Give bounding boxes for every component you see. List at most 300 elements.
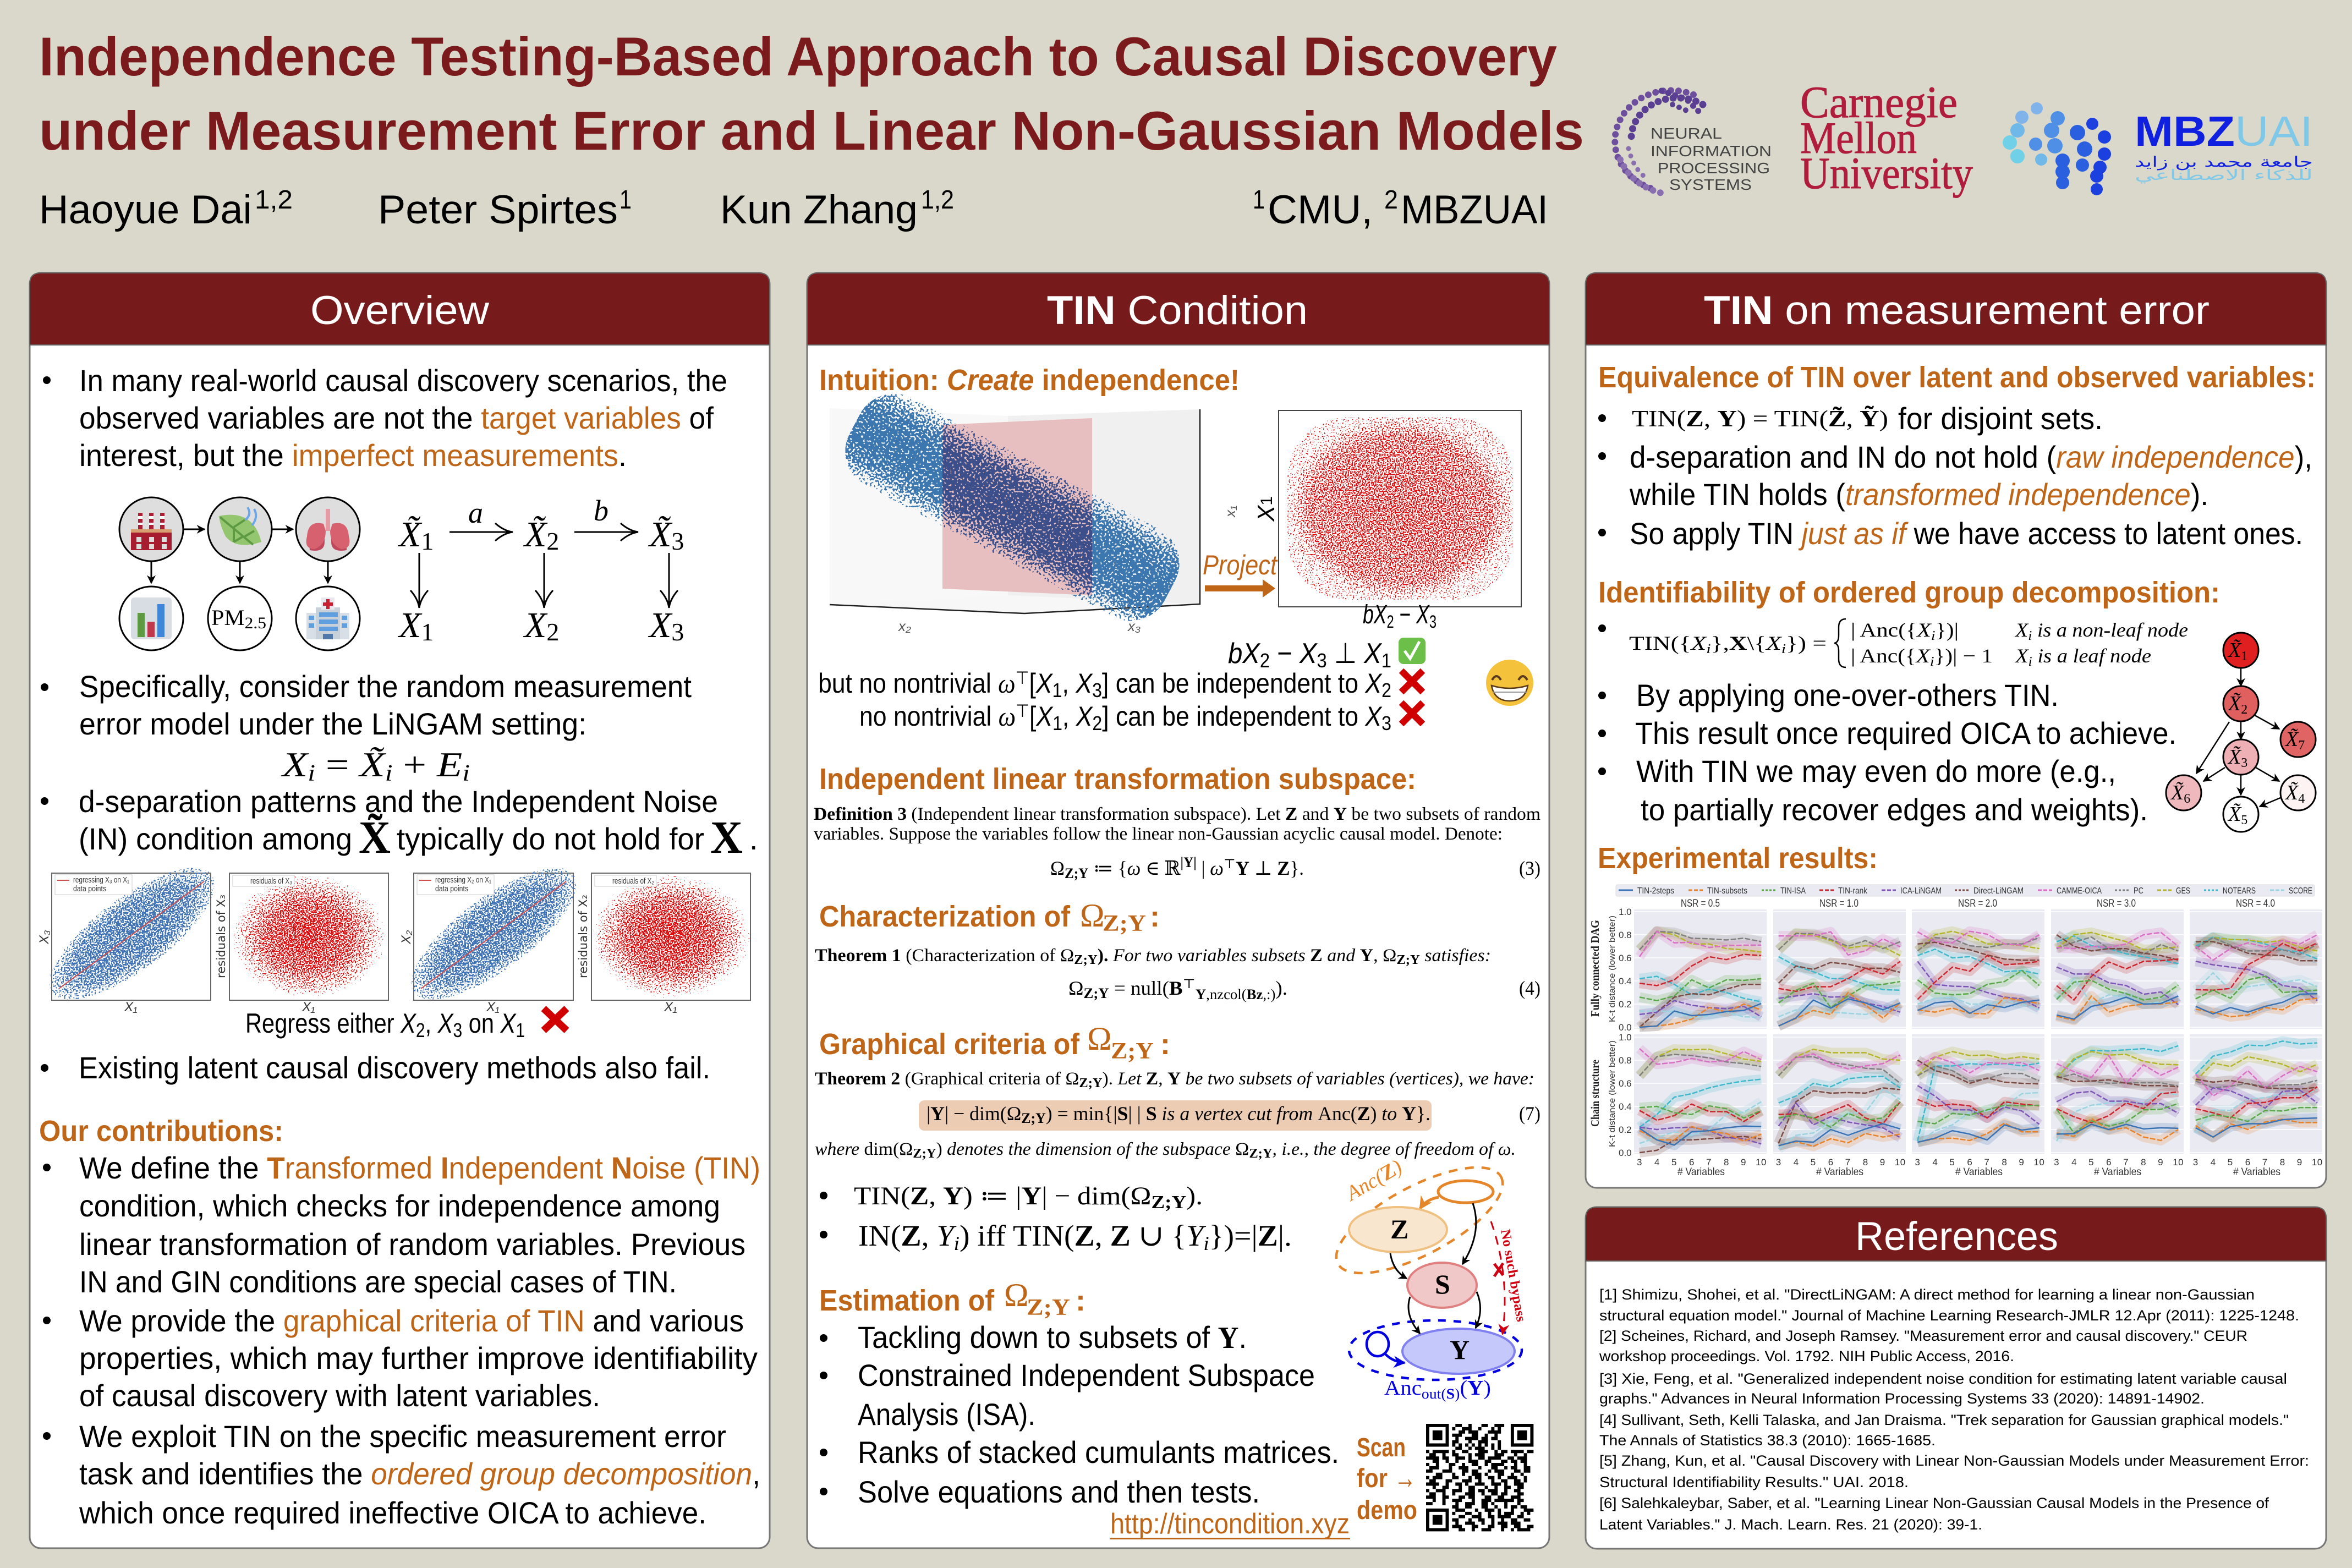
- equation: Xi = X̃i + Ei: =: [315, 745, 359, 784]
- chart: projected scatter: bX: [1363, 600, 1395, 629]
- text block: where dim: Z;Y: [913, 1147, 936, 1161]
- axis: y titles: Fully connected DAG: [1588, 920, 1602, 1017]
- text: scan for demo: demo: [1357, 1496, 1417, 1525]
- chart: regress X2 on X1: [393, 846, 595, 1022]
- text block: identifiability bullets: to partially recover edges and weights).: [1641, 792, 2148, 827]
- caption: regress either: ,: [425, 1008, 438, 1039]
- affiliations: 2: [1384, 185, 1398, 215]
- authors: Kun Zhang: [720, 188, 918, 232]
- heading: Intuition: Intuition: Create independence!: [819, 364, 1240, 397]
- icon: hospital: [306, 597, 349, 639]
- equation 4: Y: [1196, 986, 1206, 1002]
- text block: d-separation bullet: typically do not hold for: [397, 821, 704, 856]
- affiliations: MBZUAI: [1401, 188, 1548, 232]
- heading: Experimental results: Experimental results:: [1598, 842, 1878, 875]
- equation 4: ⊤: [1183, 977, 1196, 991]
- heading: Estimation: :: [1076, 1284, 1085, 1317]
- text: scan for demo: →: [1394, 1460, 1416, 1495]
- chart: projected scatter: X: [1416, 600, 1434, 629]
- text block: Theorem 2: Let Z, Y be two subsets of variables (vertices), we have:: [1117, 1069, 1528, 1089]
- caption: regress either: X: [500, 1008, 517, 1039]
- chart: projected scatter: 1: [1258, 496, 1276, 506]
- text block: independence statements: X: [1035, 701, 1054, 732]
- text block: where dim: where dim(Ω: [815, 1139, 912, 1159]
- chart: regress X3 on X1: regressing X₃ on X₁: [73, 875, 129, 885]
- text: scan for demo: Scan: [1357, 1433, 1406, 1462]
- text block: independence statements: ] can be independent to: [1102, 701, 1365, 732]
- equation: Xi = X̃i + Ei: i: [385, 761, 393, 786]
- axis: x ticks and titles: 345678910: [1637, 1157, 1766, 1167]
- text block: identifiability bullets: This result once required OICA to achieve.: [1635, 716, 2176, 750]
- logo: Carnegie Mellon University: Carnegie: [1800, 77, 1958, 127]
- axis: y ticks: 0.0: [1619, 1148, 1632, 1158]
- diagram: latent to measured variables: 1: [421, 618, 434, 646]
- text block: independence statements: ⊤: [1016, 701, 1029, 721]
- chart: 3D scatter with projection plane: [830, 380, 1238, 634]
- equation: TIN of single variable: i: [1781, 642, 1786, 656]
- diagram: ordered group decomposition DAG: 7: [2298, 738, 2305, 753]
- diagram: latent to measured variables: a: [468, 496, 483, 529]
- text block: independence statements: ⊤: [1016, 668, 1029, 688]
- caption: regress either: Regress either X: [245, 1008, 424, 1039]
- diagram: ordered group decomposition DAG: 6: [2184, 792, 2190, 806]
- heading: Characterization: Ω: [1080, 897, 1105, 934]
- axis: x ticks and titles: 345678910: [2193, 1157, 2322, 1167]
- diagram: latent to measured variables: X: [399, 605, 421, 645]
- equation 7 highlighted: ) = min{|: [1046, 1103, 1117, 1125]
- caption: regress either: 2: [416, 1019, 425, 1041]
- text block: where dim: ): [936, 1139, 942, 1159]
- text block: independence statements: no nontrivial ω: [859, 701, 1018, 732]
- equation: TIN of single variable: i: [1706, 642, 1711, 656]
- diagram: latent to measured variables: 2: [546, 618, 559, 646]
- text block: estimation bullets: Analysis (ISA).: [858, 1397, 1035, 1432]
- equation 7 highlighted: S| | S is a vertex cut from Anc(Z) to Y}.: [1117, 1103, 1430, 1125]
- axis: y titles: [1588, 915, 1617, 1147]
- text block: contributions: We exploit TIN on the specific measurement error: [79, 1419, 726, 1454]
- text block: independence statements: 3: [1317, 649, 1327, 672]
- equation: TIN of single variable: X: [2015, 619, 2027, 641]
- QR code: [1426, 1424, 1533, 1531]
- text block: where dim: denotes the dimension of the subspace Ω: [947, 1139, 1249, 1159]
- chart row: chain structure: [1634, 1034, 2322, 1154]
- chart: residuals of X3: X₁: [301, 1000, 315, 1015]
- text block: reference list: [2] Scheines, Richard, and Joseph Ramsey. "Measurement error and causal discovery." CEUR: [1599, 1328, 2247, 1344]
- chart legend: ICA-LiNGAM: [1900, 886, 1942, 896]
- equation 4: = null(: [1109, 977, 1169, 999]
- text block: d-separation bullet: .: [749, 821, 758, 856]
- logo: NeurIPS: NEURAL: [1651, 125, 1722, 142]
- text block: Definition 3: variables. Suppose the variables follow the linear non-Gaussian acyclic causal model. Denote:: [814, 824, 1503, 844]
- text block: independence statements: bX: [1228, 638, 1263, 670]
- text block: d-separation bullet: (IN) condition among: [79, 821, 352, 856]
- equation 4: ,nzcol(Bz,:): [1206, 986, 1275, 1002]
- diagram: ordered group decomposition DAG: X̃: [2228, 803, 2241, 826]
- text block: TIN definitions: IN(Z, Y: [858, 1219, 953, 1252]
- text block: equivalence bullets: d-separation and IN do not hold (raw independence),: [1630, 440, 2312, 474]
- equation 7 highlighted: [919, 1100, 1540, 1131]
- text block: reference list: The Annals of Statistics 38.3 (2010): 1665-1685.: [1599, 1432, 1936, 1449]
- equation 3: ⊥ Z}.: [1254, 857, 1304, 879]
- label: PM2.5: 2.5: [245, 614, 266, 632]
- text block: Definition 3: [814, 804, 1540, 844]
- text block: independence statements: [: [1029, 701, 1036, 732]
- axis: y ticks: 0.4: [1619, 1101, 1632, 1112]
- chart: residuals of X2: [577, 873, 750, 1015]
- caption: regress either: 1: [516, 1019, 525, 1041]
- text block: equivalence bullets: [1598, 401, 2312, 551]
- equation 4: [1068, 977, 1540, 1002]
- diagram: latent to measured variables: 1: [421, 527, 434, 555]
- panel: Overview: [30, 273, 770, 1548]
- logo: NeurIPS: PROCESSING: [1658, 160, 1770, 177]
- equation: TIN of single variable: },: [1711, 632, 1729, 654]
- text block: independence statements: [: [1029, 668, 1036, 699]
- text block: Theorem 1: Z;Y: [1074, 953, 1098, 967]
- heading: Characterization: Characterization of: [819, 900, 1071, 933]
- equation: TIN of single variable: i: [2028, 655, 2032, 669]
- link: http://tincondition.xyz: [1110, 1508, 1350, 1540]
- equation: Xi = X̃i + Ei: i: [308, 761, 315, 786]
- equation 4: Ω: [1068, 977, 1083, 999]
- heading: Graphical criteria: [819, 1021, 1170, 1064]
- equation 4: B: [1169, 977, 1183, 999]
- diagram: vertex cut graph: out(: [1422, 1386, 1446, 1402]
- text block: independence statements: X: [1364, 668, 1383, 699]
- text block: TIN definitions: Z;Y: [1152, 1192, 1186, 1213]
- text block: independence statements: 1: [1381, 649, 1391, 672]
- equation: TIN of single variable: | Anc({ X: [1851, 619, 1929, 641]
- title: [39, 26, 1584, 161]
- text block: TIN definitions: i: [954, 1232, 960, 1254]
- text block: Theorem 2: Z;Y: [1079, 1076, 1102, 1090]
- diagram: ordered group decomposition DAG: X̃: [2285, 728, 2298, 751]
- affiliations: 1: [1253, 185, 1265, 215]
- axis: y titles: K-t distance (lower better): [1608, 915, 1617, 1022]
- diagram: ordered group decomposition DAG: 2: [2241, 703, 2247, 717]
- logo: MBZUAI: UAI: [2235, 108, 2313, 155]
- diagram: vertex cut graph: Anc(Z): [1341, 1155, 1406, 1206]
- text block: measurement error model: error model under the LiNGAM setting:: [79, 706, 586, 741]
- chart: projected scatter: X: [1253, 506, 1280, 522]
- caption: regress either: on: [462, 1008, 501, 1039]
- chart: regress X3 on X1: [31, 846, 233, 1022]
- chart: regress X2 on X1: X₁: [486, 1000, 500, 1015]
- text block: contributions: which once required ineffective OICA to achieve.: [79, 1495, 706, 1530]
- diagram: ordered group decomposition DAG: 5: [2241, 813, 2247, 827]
- text block: independence statements: 3: [1092, 679, 1102, 701]
- diagram: latent to measured variables: b: [594, 494, 608, 527]
- text block: independence statements: X: [1076, 701, 1093, 732]
- text block: independence statements: −: [1270, 638, 1300, 670]
- equation: TIN of single variable: })| − 1: [1934, 645, 1993, 667]
- text block: contributions: We provide the graphical criteria of TIN and various: [79, 1303, 744, 1338]
- equation: Xi = X̃i + Ei: E: [437, 745, 458, 784]
- caption: regress either: X: [437, 1008, 454, 1039]
- icon: leaf: [219, 507, 261, 545]
- axis: y ticks: 0.6: [1619, 1078, 1632, 1089]
- logo: NeurIPS: [1615, 90, 1772, 194]
- chart: regress X3 on X1: X₃: [37, 930, 52, 945]
- chart: regress X3 on X1: data points: [73, 884, 106, 893]
- chart titles: NSR = 2.0: [1958, 898, 1997, 909]
- text block: equivalence bullets: So apply TIN just as if we have access to latent ones.: [1630, 516, 2303, 551]
- equation 7 highlighted: (7): [1519, 1103, 1540, 1125]
- text block: TIN definitions: i: [1203, 1232, 1209, 1254]
- chart: regress X2 on X1: data points: [435, 884, 468, 893]
- text block: Theorem 2: ).: [1102, 1069, 1113, 1089]
- chart: residuals of X2: X₁: [664, 1000, 677, 1015]
- text block: independence statements: ] can be independent to: [1102, 668, 1365, 699]
- panel: TIN Condition: [807, 273, 1549, 1548]
- diagram: ordered group decomposition DAG: X̃: [2228, 692, 2241, 715]
- icon: grinning emoji: [1486, 660, 1533, 706]
- axis: y ticks: 0.6: [1619, 953, 1632, 963]
- text block: estimation bullets: Ranks of stacked cumulants matrices.: [858, 1435, 1339, 1470]
- text block: independence statements: X: [1300, 638, 1319, 670]
- chart legend: Direct-LiNGAM: [1973, 886, 2024, 896]
- equation: TIN of single variable: | Anc({ X: [1851, 645, 1928, 667]
- text block: identifiability bullets: [1598, 678, 2176, 827]
- axis: x ticks and titles: [1637, 1157, 2322, 1178]
- text block: independence statements: 2: [1260, 649, 1270, 672]
- diagram: pollution example with icons: [119, 497, 360, 650]
- chart legend: CAMME-OICA: [2057, 886, 2102, 896]
- text block: Theorem 1: ).: [1098, 946, 1108, 966]
- text block: intro bullet: In many real-world causal discovery scenarios, the: [79, 363, 727, 398]
- text block: TIN definitions: Z, Z ∪ {Y: [1074, 1219, 1203, 1252]
- text block: reference list: [4] Sullivant, Seth, Kelli Talaska, and Jan Draisma. "Trek separation for Gaussian graphical models.": [1599, 1412, 2289, 1428]
- text block: identifiability bullets: With TIN we may even do more (e.g.,: [1636, 754, 2116, 788]
- axis: y titles: K-t distance (lower better): [1608, 1040, 1617, 1147]
- text block: reference list: graphs." Advances in Neural Information Processing Systems 33 (2020): 14891-14902.: [1599, 1390, 2205, 1407]
- text block: reference list: [3] Xie, Feng, et al. "Generalized independent noise condition for estimating latent variable causal: [1599, 1370, 2287, 1387]
- arrow: project: [1203, 550, 1278, 597]
- text block: independence statements: X: [1035, 668, 1053, 699]
- diagram: ordered group decomposition DAG: X̃: [2228, 745, 2241, 769]
- heading: References: References: [1855, 1214, 2058, 1259]
- logo: MBZUAI: [2003, 102, 2313, 195]
- equation 3: ≔ {: [1088, 857, 1127, 879]
- text block: contributions: We define the Transformed Independent Noise (TIN): [79, 1150, 760, 1185]
- heading: Estimation: Z;Y: [1027, 1295, 1070, 1320]
- chart: residuals of X3: residuals of X₃: [215, 895, 228, 978]
- equation: TIN of single variable: [1598, 619, 2188, 669]
- text block: d-separation bullet: d-separation patterns and the Independent Noise: [79, 784, 718, 819]
- equation: TIN of single variable: i: [2028, 629, 2032, 643]
- heading: Overview: Overview: [310, 288, 489, 333]
- heading: Graphical criteria: Graphical criteria of: [819, 1028, 1080, 1061]
- text block: contributions: task and identifies the ordered group decomposition,: [79, 1456, 760, 1491]
- axis: y ticks: [1619, 907, 1632, 1158]
- axis: x ticks and titles: 345678910: [1915, 1157, 2044, 1167]
- axis: x ticks and titles: # Variables: [2094, 1166, 2141, 1178]
- diagram: latent to measured variables: X̃: [399, 514, 421, 555]
- chart titles: NSR = 0.5: [1681, 898, 1720, 909]
- text block: Theorem 1: Theorem 1 (Characterization of Ω: [815, 946, 1070, 966]
- chart titles: NSR = 4.0: [2236, 898, 2275, 909]
- equation 3: |Y|: [1181, 854, 1197, 870]
- text block: Definition 3: Definition 3 (Independent linear transformation subspace). Let Z and Y be two subsets of random: [814, 804, 1540, 824]
- equation 3: ω ∈ ℝ: [1127, 857, 1182, 879]
- chart titles: NSR = 3.0: [2097, 898, 2136, 909]
- diagram: latent to measured variables: [397, 494, 684, 646]
- equation: TIN of single variable: X: [2015, 645, 2027, 667]
- heading: TIN Condition: TIN Condition: [1047, 288, 1308, 333]
- text block: d-separation bullet: X̃: [359, 812, 391, 863]
- icon: red crosses: [1401, 671, 1423, 724]
- text block: independence statements: 1: [1052, 712, 1062, 734]
- diagram: vertex cut graph: Z: [1390, 1214, 1408, 1244]
- chart: residuals of X3: residuals of X₃: [250, 876, 292, 886]
- text block: estimation bullets: Solve equations and then tests.: [858, 1474, 1260, 1509]
- chart legend: GES: [2176, 886, 2190, 896]
- diagram: ordered group decomposition DAG: 3: [2241, 756, 2247, 770]
- authors: 1: [619, 185, 632, 215]
- equation: TIN of single variable: i: [1930, 655, 1934, 669]
- title: Independence Testing-Based Approach to Causal Discovery: [39, 26, 1557, 87]
- diagram: ordered group decomposition DAG: X̃: [2285, 781, 2298, 804]
- logo: Carnegie Mellon University: [1800, 77, 1973, 198]
- equation: Xi = X̃i + Ei: i: [462, 761, 470, 786]
- text block: reference list: [1] Shimizu, Shohei, et al. "DirectLiNGAM: A direct method for learning a linear non-Gaussian: [1599, 1286, 2255, 1303]
- equation: TIN of single variable: is a leaf node: [2032, 645, 2151, 667]
- axis: x ticks and titles: 345678910: [2054, 1157, 2184, 1167]
- text block: estimation bullets: [820, 1320, 1339, 1509]
- chart: regress X2 on X1: regressing X₂ on X₁: [435, 875, 491, 885]
- diagram: latent to measured variables: 3: [671, 527, 684, 555]
- diagram: vertex cut graph: (: [1460, 1377, 1467, 1400]
- authors: [39, 185, 954, 232]
- text block: independence statements: X: [1075, 668, 1093, 699]
- text block: TIN definitions: [820, 1182, 1292, 1254]
- chart legend: [1616, 885, 2315, 896]
- arrow: project: Project: [1203, 550, 1278, 580]
- text block: estimation bullets: Tackling down to subsets of Y.: [858, 1320, 1247, 1355]
- logo: MBZUAI: للذكاء الاصطناعي: [2135, 167, 2313, 184]
- heading: Estimation: Estimation of: [819, 1284, 995, 1317]
- text block: reference list: [1599, 1286, 2309, 1533]
- logo: MBZUAI: MBZ: [2135, 108, 2235, 155]
- icon: factory: [131, 513, 172, 550]
- text block: independence statements: 3: [1381, 712, 1391, 734]
- text: scan for demo: [1357, 1433, 1417, 1525]
- text block: TIN definitions: })=|: [1209, 1219, 1258, 1252]
- equation 4: ).: [1275, 977, 1287, 999]
- equation: Xi = X̃i + Ei: X̃: [359, 745, 381, 784]
- diagram: ordered group decomposition DAG: 1: [2241, 649, 2247, 664]
- text block: equivalence bullets: for disjoint sets.: [1898, 401, 2103, 436]
- diagram: latent to measured variables: X̃: [649, 514, 671, 555]
- axis: y titles: Chain structure: [1588, 1060, 1602, 1127]
- text block: independence statements: [818, 638, 1391, 734]
- chart row: fully connected DAG: [1634, 909, 2322, 1029]
- chart: regress X3 on X1: X₁: [124, 1000, 138, 1015]
- text: scan for demo: for: [1357, 1464, 1388, 1493]
- chart: results line plots: [1588, 898, 2322, 1178]
- text block: equivalence bullets: TIN( Z, Y) = TIN( Z̃, Ỹ): [1632, 405, 1888, 432]
- text block: reference list: [6] Salehkaleybar, Saber, et al. "Learning Linear Non-Gaussian Causal Models in the Presence of: [1599, 1495, 2269, 1511]
- diagram: vertex cut graph: [1322, 1147, 1528, 1402]
- diagram: latent to measured variables: 3: [671, 618, 684, 646]
- diagram: vertex cut graph: S: [1446, 1386, 1455, 1402]
- chart: projected scatter: −: [1394, 600, 1416, 629]
- authors: 1,2: [255, 185, 293, 215]
- title: under Measurement Error and Linear Non-Gaussian Models: [39, 100, 1584, 161]
- text block: reference list: workshop proceedings. Vol. 1792. NIH Public Access, 2016.: [1599, 1348, 2014, 1364]
- heading: Graphical criteria: :: [1160, 1028, 1170, 1061]
- equation: TIN of single variable: X\{X: [1729, 632, 1778, 654]
- text block: contributions: of causal discovery with latent variables.: [79, 1378, 600, 1413]
- diagram: ordered group decomposition DAG: 4: [2298, 792, 2305, 806]
- text block: independence statements: 2: [1092, 712, 1102, 734]
- chart: 3D scatter with projection plane: x₃: [1127, 618, 1141, 634]
- authors: Peter Spirtes: [378, 188, 618, 232]
- heading: Characterization: [819, 897, 1160, 936]
- authors: 1,2: [921, 185, 954, 215]
- axis: y ticks: 0.8: [1619, 930, 1632, 940]
- diagram: vertex cut graph: Y: [1450, 1334, 1470, 1365]
- heading: Our contributions: Our contributions:: [39, 1115, 283, 1148]
- text block: TIN definitions: ) iff TIN(: [960, 1219, 1074, 1252]
- equation: Xi = X̃i + Ei: +: [393, 745, 437, 784]
- chart legend: NOTEARS: [2223, 886, 2256, 896]
- logo: Carnegie Mellon University: Mellon: [1800, 113, 1917, 163]
- chart: regress X2 on X1: X₂: [399, 930, 414, 945]
- icon: red cross: [544, 1008, 567, 1030]
- icon: check mark: [1399, 638, 1426, 664]
- axis: x ticks and titles: # Variables: [1677, 1166, 1725, 1178]
- equation 3: Ω: [1050, 857, 1065, 879]
- equation: TIN of single variable: TIN({ X: [1629, 632, 1703, 654]
- text block: independence statements: X: [1364, 638, 1383, 670]
- text block: independence statements: X: [1365, 701, 1383, 732]
- equation: TIN of single variable: i: [1931, 629, 1936, 643]
- axis: y ticks: 1.0: [1619, 907, 1632, 917]
- axis: y ticks: 0.8: [1619, 1055, 1632, 1066]
- text block: measurement error model: [41, 669, 692, 741]
- heading: Independent linear transformation subspace: Independent linear transformation subspace:: [819, 763, 1416, 796]
- chart legend: TIN-subsets: [1707, 886, 1747, 896]
- chart legend: PC: [2134, 886, 2143, 896]
- equation 7 highlighted: Z;Y: [1021, 1110, 1046, 1126]
- heading: Equivalence: Equivalence of TIN over latent and observed variables:: [1598, 361, 2316, 394]
- text block: independence statements: but no nontrivial ω: [818, 668, 1017, 699]
- caption: regress either: 3: [453, 1019, 462, 1041]
- equation 4: Z;Y: [1084, 985, 1109, 1001]
- equation 3: Y: [1236, 857, 1249, 879]
- diagram: latent to measured variables: X: [649, 605, 671, 645]
- heading: Estimation: [819, 1277, 1085, 1320]
- text block: existing methods: Existing latent causal discovery methods also fail.: [79, 1050, 710, 1085]
- panel: References: [1586, 1207, 2326, 1549]
- heading: Identifiability: Identifiability of ordered group decomposition:: [1598, 576, 2220, 609]
- axis: x ticks and titles: # Variables: [1816, 1166, 1863, 1178]
- text block: contributions: condition, which checks for independence among: [79, 1188, 720, 1223]
- equation 3: ω: [1210, 857, 1224, 879]
- text block: Theorem 1: satisfies:: [1420, 946, 1491, 966]
- diagram: vertex cut graph: No such bypass: [1498, 1228, 1528, 1323]
- diagram: ordered group decomposition DAG: X̃: [2228, 639, 2241, 662]
- text block: measurement error model: Specifically, consider the random measurement: [79, 669, 692, 704]
- equation: TIN of single variable: is a non-leaf node: [2032, 619, 2188, 641]
- text block: Theorem 1: For two variables subsets Z and Y, Ω: [1113, 946, 1396, 966]
- equation 4: (4): [1519, 977, 1540, 999]
- chart: residuals of X2: residuals of X₂: [612, 876, 654, 886]
- text block: d-separation bullet: [41, 784, 758, 863]
- equation: TIN of single variable: }) =: [1786, 632, 1827, 654]
- chart legend: TIN-rank: [1838, 886, 1868, 896]
